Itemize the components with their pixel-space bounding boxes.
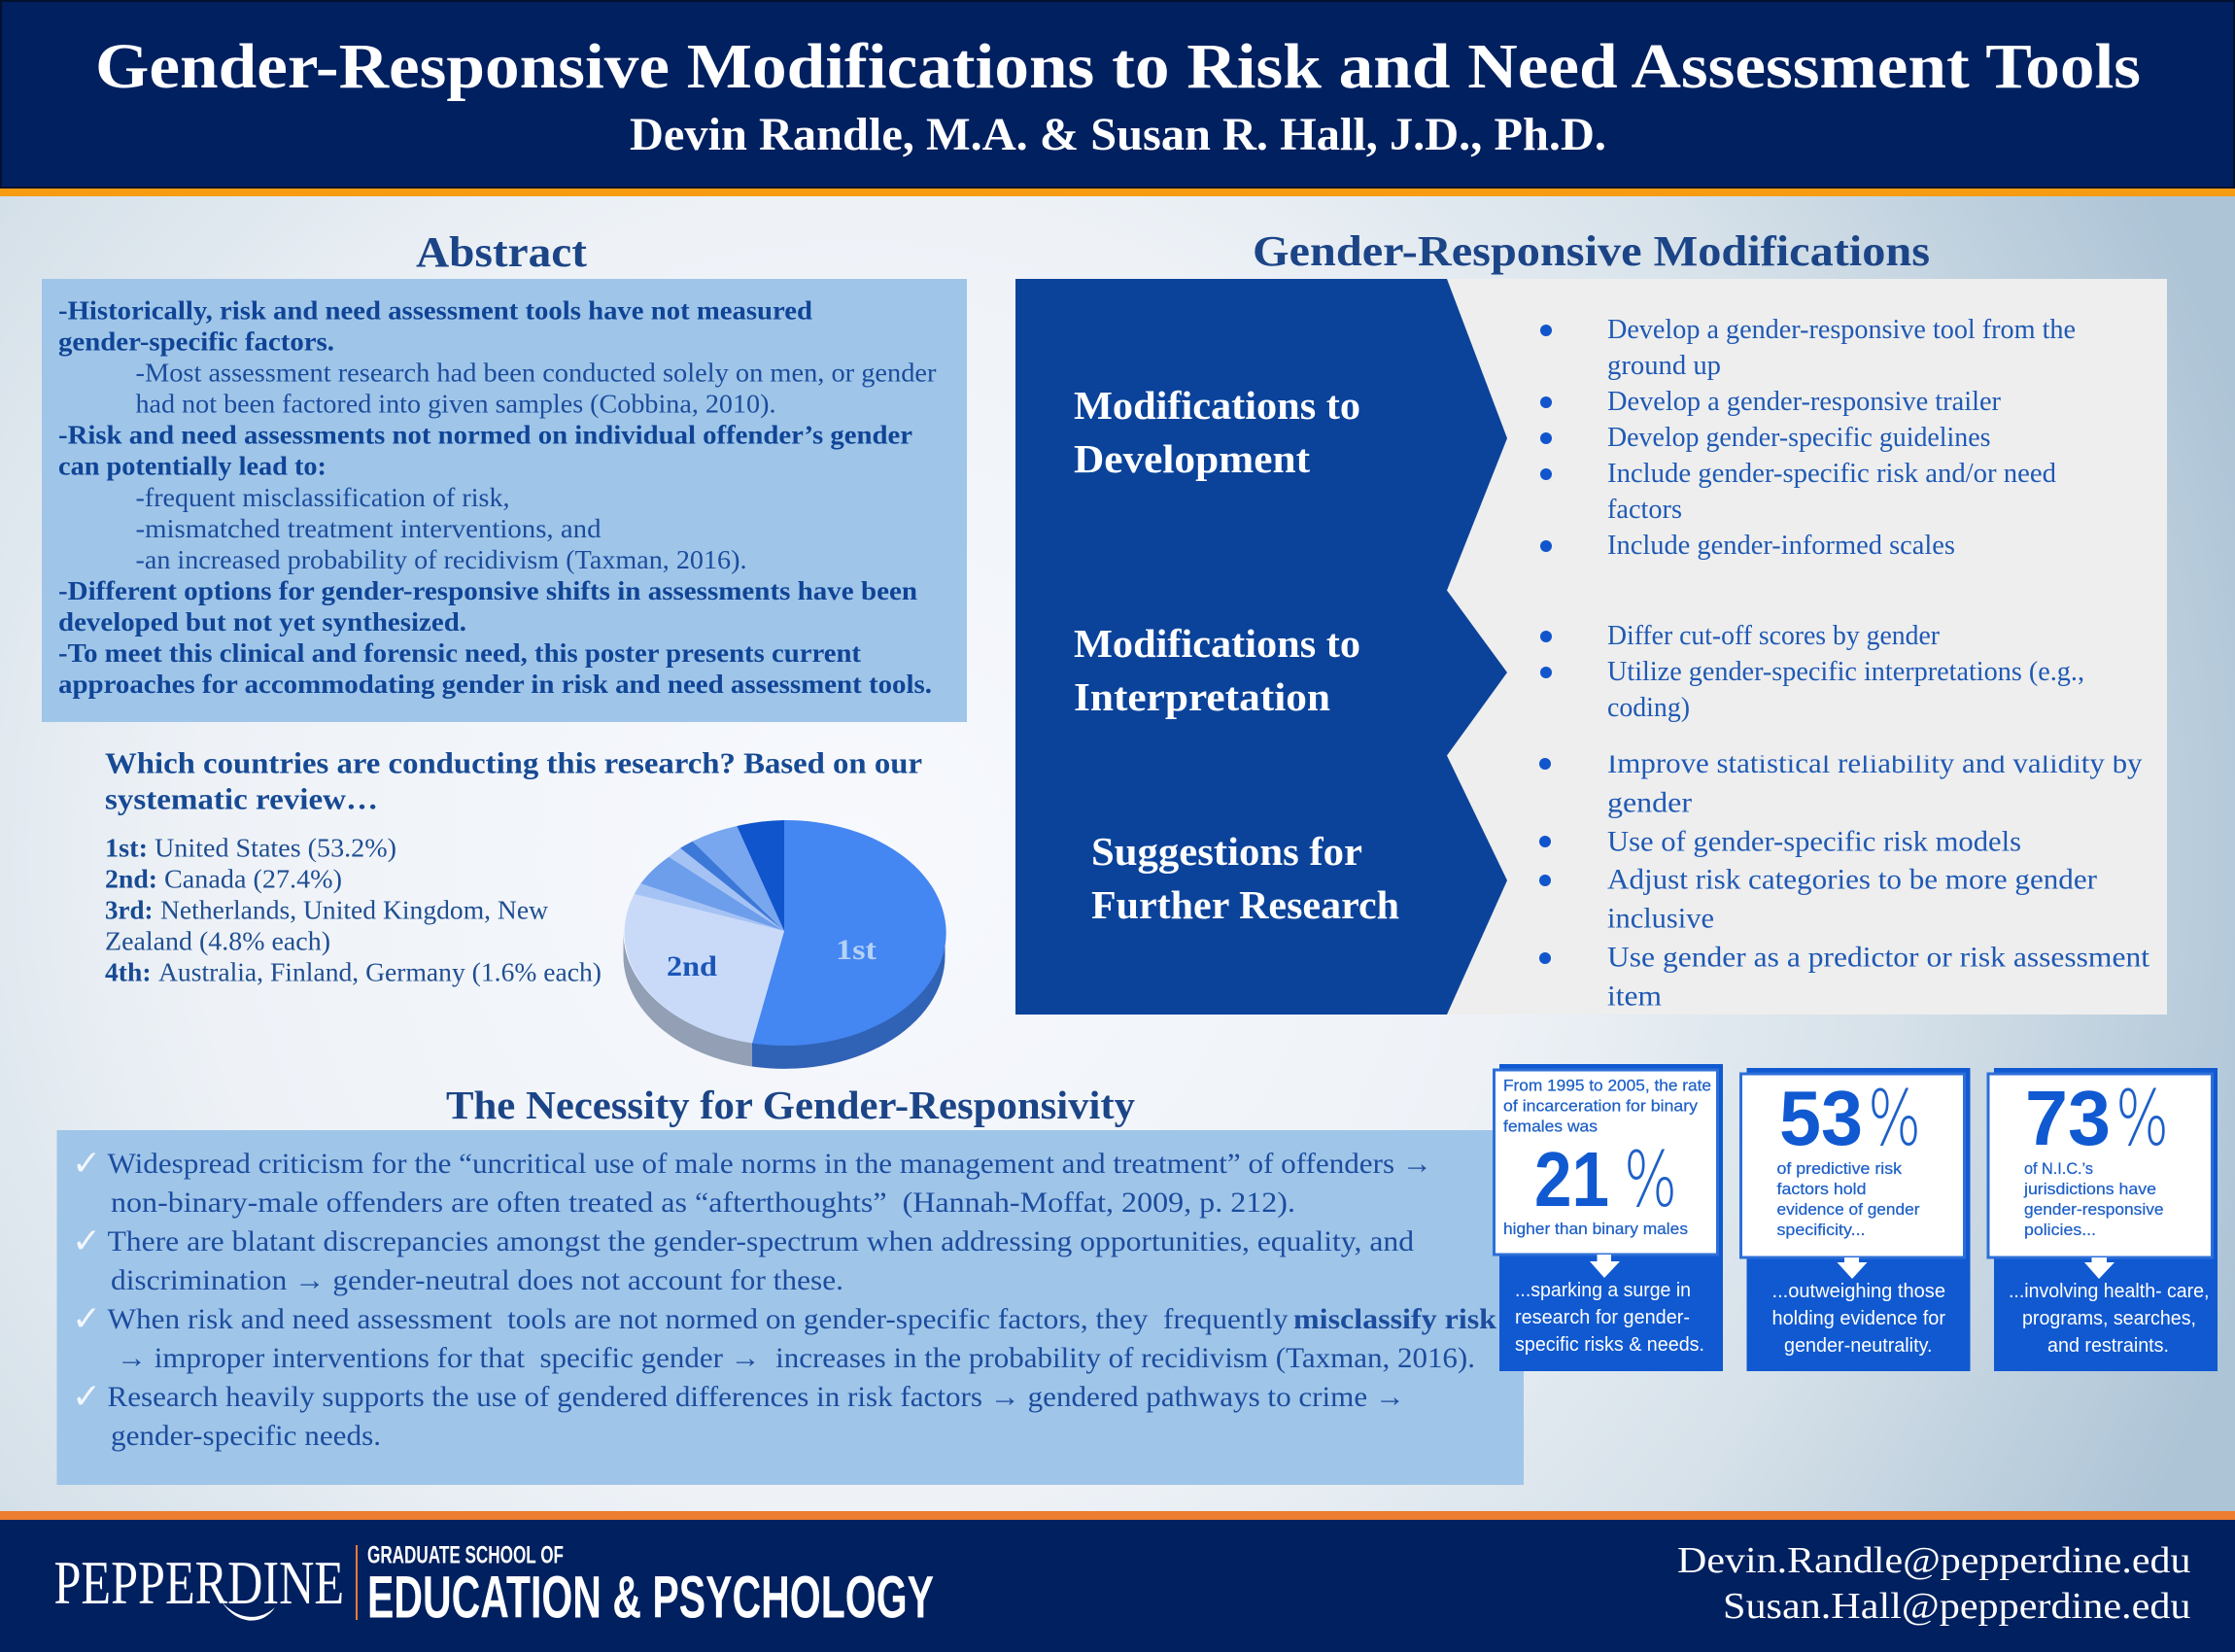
bullet list: interpretation — [1540, 621, 2084, 723]
bullet list: development: Develop a gender-responsive tool from the — [1607, 315, 2076, 345]
check marks — [72, 1144, 101, 1417]
stat card: 21%: ...sparking a surge in — [1515, 1280, 1691, 1301]
panel: abstract: -To meet this clinical and forensic need, this poster presents current — [58, 638, 861, 668]
stat card: 73%: jurisdictions have — [2023, 1180, 2156, 1198]
contact: emails: Devin.Randle@pepperdine.edu — [1677, 1540, 2190, 1581]
stat card: 73%: ...involving health- care, — [2009, 1281, 2210, 1302]
stat card: 53% — [1741, 1068, 1971, 1371]
panel: necessity for gender-responsivity — [56, 1130, 1524, 1485]
panel: necessity for gender-responsivity: There are blatant discrepancies amongst the gender-spectrum when addressing opportunities, equality, and — [107, 1225, 1414, 1257]
contact: emails: Susan.Hall@pepperdine.edu — [1723, 1586, 2190, 1627]
pie chart — [624, 820, 946, 1069]
stat card: 21%: From 1995 to 2005, the rate — [1503, 1077, 1711, 1094]
chevron: modifications to development: Development — [1074, 436, 1310, 481]
panel: abstract: developed but not yet synthesized. — [58, 607, 466, 637]
stat card: 73%: programs, searches, — [2022, 1308, 2196, 1329]
check marks: ✓ — [72, 1222, 101, 1261]
arrow — [1837, 1257, 1868, 1279]
stat card: 53%: 53 — [1779, 1075, 1863, 1161]
stat card: 53%: evidence of gender — [1776, 1200, 1920, 1219]
chevron: suggestions for further research: Further Research — [1091, 882, 1399, 927]
heading: gender-responsive modifications: Gender-Responsive Modifications — [1253, 227, 1930, 275]
panel: abstract: -Risk and need assessments not normed on individual offender’s gender — [58, 420, 912, 449]
country ranking list: United States (53.2%) — [155, 834, 396, 863]
panel: necessity for gender-responsivity: → improper interventions for that specific gender → increases in the probability of recidivism (Taxman, 2016). — [117, 1342, 1475, 1374]
country ranking list: 1st: — [105, 834, 148, 863]
stat card: 21%: higher than binary males — [1503, 1220, 1688, 1238]
title: Gender-Responsive Modifications to Risk and Need Assessment Tools — [95, 31, 2141, 102]
bullet list: further research — [1539, 747, 2150, 1013]
stat card: 53%: specificity... — [1776, 1221, 1866, 1239]
panel: necessity for gender-responsivity: gender-specific needs. — [111, 1420, 381, 1452]
footer banner — [0, 1511, 2235, 1652]
stat card: 53%: % — [1868, 1076, 1921, 1163]
panel: abstract: -an increased probability of recidivism (Taxman, 2016). — [136, 545, 746, 574]
chevron: modifications to interpretation: Interpretation — [1074, 674, 1330, 719]
stat card: 21%: of incarceration for binary — [1503, 1096, 1699, 1116]
panel: necessity for gender-responsivity: misclassify risk — [1293, 1303, 1496, 1335]
bullet list: further research: Use of gender-specific risk models — [1607, 826, 2021, 857]
bullet list: development: Include gender-specific risk and/or need — [1607, 459, 2056, 489]
panel: abstract: -mismatched treatment interventions, and — [136, 514, 602, 543]
stat card: 21%: females was — [1503, 1118, 1598, 1135]
authors: Devin Randle, M.A. & Susan R. Hall, J.D., Ph.D. — [630, 109, 1606, 160]
stat card: 53%: factors hold — [1776, 1180, 1866, 1198]
stat card: 21%: 21 — [1534, 1136, 1609, 1222]
stat card: 53%: holding evidence for — [1772, 1308, 1945, 1329]
chevron: modifications to development — [1015, 279, 1507, 591]
country ranking list: Australia, Finland, Germany (1.6% each) — [158, 958, 602, 987]
stat card: 73%: gender-responsive — [2024, 1200, 2163, 1219]
chevron: suggestions for further research: Suggestions for — [1091, 829, 1362, 874]
chevron: suggestions for further research — [1015, 756, 1507, 1015]
countries question: systematic review… — [105, 781, 378, 816]
bullet list: further research: gender — [1607, 787, 1692, 818]
bullet list: interpretation: Utilize gender-specific interpretations (e.g., — [1607, 657, 2084, 687]
pie label: 2nd: 2nd — [667, 950, 717, 982]
chevron: modifications to development: Modifications to — [1074, 383, 1360, 428]
bullet list: further research: Use gender as a predictor or risk assessment — [1607, 941, 2150, 974]
text block: countries research — [105, 746, 922, 987]
panel: abstract: gender-specific factors. — [58, 327, 334, 356]
bullet list: interpretation: Differ cut-off scores by gender — [1607, 621, 1941, 651]
panel: necessity for gender-responsivity: discrimination → gender-neutral does not account for these. — [111, 1264, 843, 1296]
country ranking list — [105, 834, 602, 987]
stat card: 21%: research for gender- — [1515, 1307, 1690, 1328]
country ranking list: Zealand (4.8% each) — [105, 927, 330, 956]
stat card: 73%: 73 — [2025, 1075, 2111, 1161]
logo: Education & Psychology: EDUCATION & PSYCHOLOGY — [367, 1565, 934, 1631]
country ranking list: Canada (27.4%) — [164, 865, 342, 894]
check marks: ✓ — [72, 1299, 101, 1339]
panel: necessity for gender-responsivity: Research heavily supports the use of gendered differences in risk factors → gendered pathways to crime → — [107, 1381, 1405, 1413]
pie label: 1st: 1st — [836, 934, 877, 966]
panel: abstract: -frequent misclassification of risk, — [136, 483, 509, 512]
bullet list: interpretation: coding) — [1607, 693, 1690, 723]
bullet list: development: ground up — [1607, 351, 1721, 381]
panel: necessity for gender-responsivity: Widespread criticism for the “uncritical use of male norms in the management and treatment” of offenders → — [107, 1148, 1432, 1180]
check marks: ✓ — [72, 1144, 101, 1184]
panel: abstract: -Most assessment research had been conducted solely on men, or gender — [136, 358, 937, 387]
panel: abstract: had not been factored into given samples (Cobbina, 2010). — [136, 389, 775, 418]
arrow — [1590, 1255, 1620, 1278]
panel: abstract: -Different options for gender-responsive shifts in assessments have been — [58, 576, 917, 605]
country ranking list: 3rd: — [105, 896, 154, 925]
stat card: 73%: and restraints. — [2047, 1335, 2169, 1357]
stat card: 21%: specific risks & needs. — [1515, 1334, 1704, 1356]
stat card: 53%: gender-neutrality. — [1784, 1335, 1932, 1357]
panel: abstract: -Historically, risk and need assessment tools have not measured — [58, 295, 812, 325]
bullet list: further research: Improve statistical reliability and validity by — [1607, 747, 2142, 779]
heading: necessity for gender-responsivity: The Necessity for Gender-Responsivity — [446, 1083, 1136, 1127]
chevron: modifications to interpretation: Modifications to — [1074, 621, 1360, 666]
country ranking list: Netherlands, United Kingdom, New — [160, 896, 549, 925]
panel: abstract: approaches for accommodating gender in risk and need assessment tools. — [58, 670, 932, 699]
arrow — [2084, 1257, 2115, 1279]
stat card: 21%: % — [1624, 1137, 1677, 1224]
panel: gender-responsive modifications — [1015, 279, 2167, 1015]
stat card: 21% — [1495, 1064, 1723, 1371]
check marks: ✓ — [72, 1377, 101, 1417]
panel: necessity for gender-responsivity: When risk and need assessment tools are not normed on gender-specific factors, they frequently — [107, 1303, 1289, 1335]
stat card: 73%: of N.I.C.’s — [2024, 1159, 2093, 1178]
bullet list: further research: item — [1607, 980, 1662, 1013]
bullet list: development: factors — [1607, 495, 1682, 525]
stat card: 73%: policies... — [2024, 1221, 2096, 1239]
bullet list: development: Develop a gender-responsive trailer — [1607, 387, 2002, 417]
bullet list: further research: inclusive — [1607, 902, 1714, 935]
country ranking list: 4th: — [105, 958, 152, 987]
stat card: 53%: of predictive risk — [1776, 1159, 1903, 1178]
heading: abstract: Abstract — [416, 228, 587, 276]
country ranking list: 2nd: — [105, 865, 157, 894]
bullet list: further research: Adjust risk categories to be more gender — [1607, 863, 2097, 896]
countries question — [105, 746, 922, 816]
panel: necessity for gender-responsivity: non-binary-male offenders are often treated as “afterthoughts” (Hannah-Moffat, 2009, p. 212). — [111, 1187, 1295, 1219]
panel: abstract: can potentially lead to: — [58, 451, 327, 480]
chevron: modifications to interpretation — [1015, 591, 1507, 756]
countries question: Which countries are conducting this research? Based on our — [105, 746, 922, 779]
contact: emails — [1677, 1540, 2190, 1627]
stat card: 73% — [1988, 1068, 2218, 1371]
panel: abstract — [42, 279, 967, 722]
logo: Graduate School of: GRADUATE SCHOOL OF — [367, 1541, 564, 1568]
bullet list: development — [1540, 315, 2076, 561]
bullet list: development: Include gender-informed scales — [1607, 531, 1955, 561]
logo: Pepperdine: PEPPERDINE — [54, 1548, 344, 1617]
bullet list: development: Develop gender-specific guidelines — [1607, 423, 1990, 453]
header banner — [0, 0, 2235, 196]
stat card: 53%: ...outweighing those — [1772, 1281, 1945, 1302]
stat card: 73%: % — [2115, 1076, 2169, 1163]
